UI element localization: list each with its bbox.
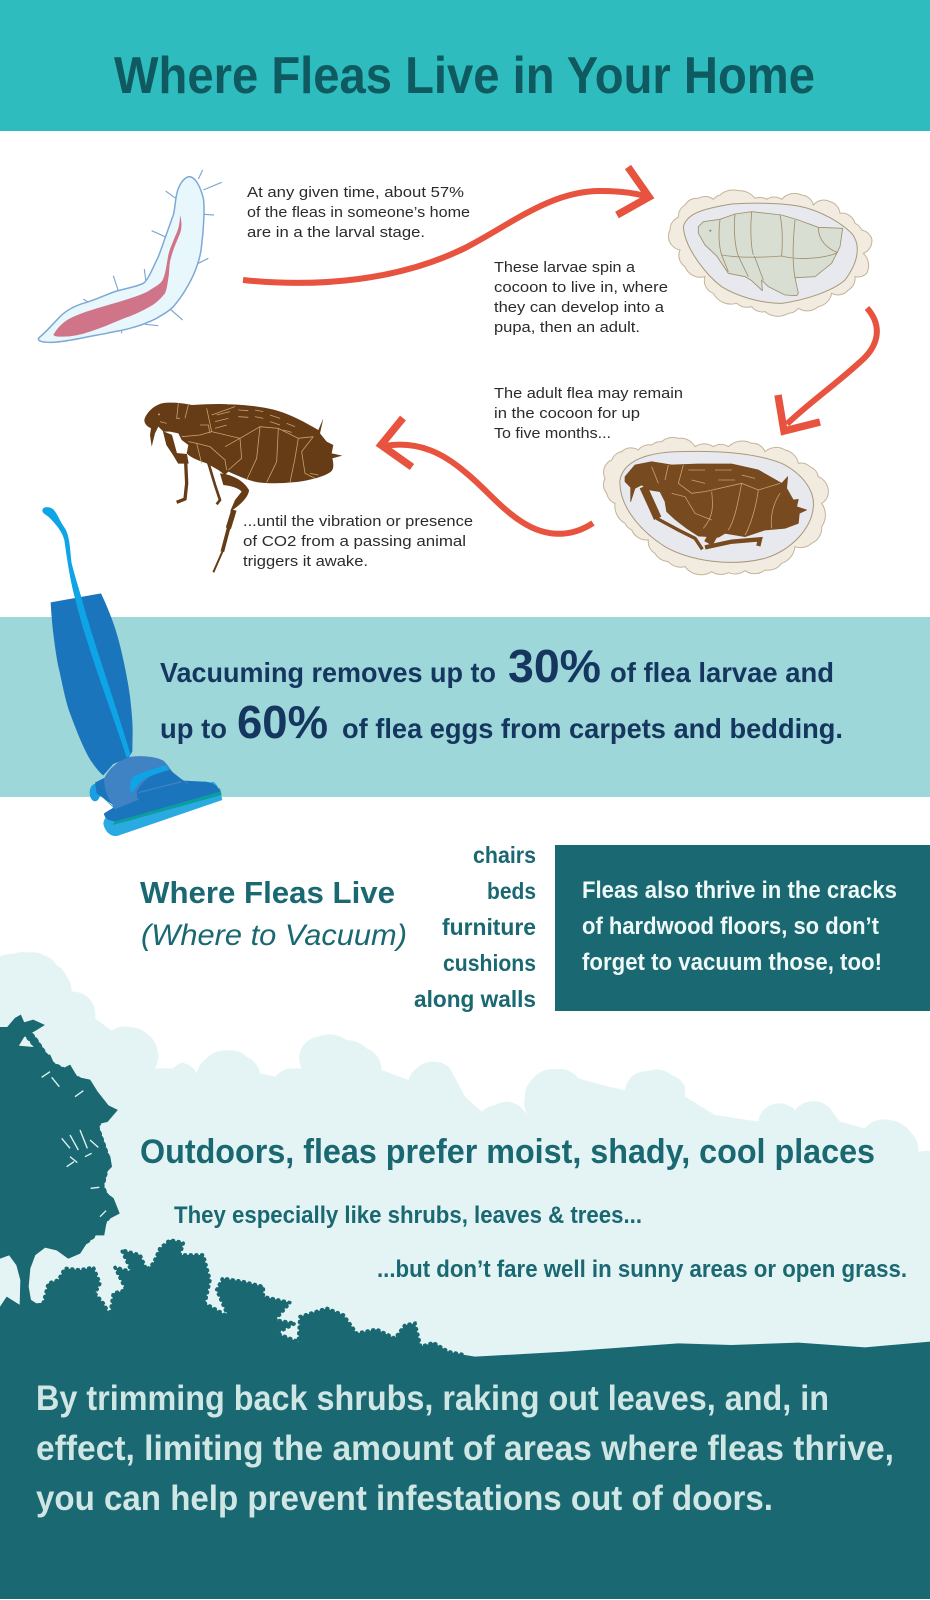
vacuuming statistics: Vacuuming removes up to — [160, 657, 496, 688]
text: prevention advice: By trimming back shrubs, raking out leaves, and, in — [36, 1379, 829, 1418]
heading: where fleas live: Where Fleas Live — [140, 875, 395, 910]
illustration: pale hill and cloud backdrop — [0, 952, 930, 1407]
text: cocoon: they can develop into a — [494, 299, 665, 316]
heading: where fleas live — [140, 875, 407, 952]
callout: hardwood floors: forget to vacuum those, too! — [582, 949, 882, 976]
arrow: back to free adult flea — [381, 418, 593, 534]
vacuuming statistics: 60% — [237, 696, 328, 748]
list: places to vacuum: furniture — [442, 914, 536, 940]
text: cocoon: These larvae spin a — [494, 259, 636, 276]
text: larval stage: At any given time, about 57% — [247, 184, 464, 201]
text: larval stage: are in a the larval stage. — [247, 224, 425, 241]
heading: where fleas live: (Where to Vacuum) — [141, 919, 407, 952]
text: trigger: of CO2 from a passing animal — [243, 533, 466, 550]
text: cocoon — [494, 259, 668, 336]
text: trigger: triggers it awake. — [243, 553, 368, 570]
icon: cocoon with pupa — [668, 190, 872, 316]
illustration: tree and shrub silhouette — [0, 1015, 930, 1599]
text: trigger — [243, 513, 473, 570]
header banner — [0, 0, 930, 131]
panel: vacuuming band — [0, 617, 930, 797]
vacuuming statistics: 30% — [508, 640, 601, 692]
text: prevention advice: you can help prevent infestations out of doors. — [36, 1479, 773, 1518]
list: places to vacuum — [414, 842, 536, 1012]
callout: hardwood floors — [555, 845, 930, 1011]
arrow: cocoon to adult in cocoon — [778, 308, 877, 431]
arrow: larva to cocoon — [243, 167, 649, 283]
text: larval stage: of the fleas in someone’s home — [247, 204, 470, 221]
list: places to vacuum: beds — [487, 878, 536, 904]
tree — [0, 1015, 119, 1305]
text: adult remains — [494, 385, 683, 442]
title: Where Fleas Live in Your Home — [114, 47, 815, 105]
text: adult remains: in the cocoon for up — [494, 405, 640, 422]
vacuuming statistics: of flea eggs from carpets and bedding. — [342, 713, 843, 744]
text: outdoors: They especially like shrubs, leaves & trees... — [174, 1202, 642, 1229]
text: larval stage — [247, 184, 470, 241]
text: cocoon: pupa, then an adult. — [494, 319, 640, 336]
vacuuming statistics: of flea larvae and — [610, 657, 834, 688]
callout: hardwood floors: of hardwood floors, so don’t — [582, 913, 879, 940]
text: prevention advice — [36, 1379, 894, 1518]
ground shrubs and hill — [0, 1240, 930, 1599]
text: adult remains: To five months... — [494, 425, 611, 442]
text: outdoors: Outdoors, fleas prefer moist, shady, cool places — [140, 1133, 875, 1171]
icon: flea larva — [38, 170, 222, 342]
list: places to vacuum: chairs — [473, 842, 536, 868]
callout: hardwood floors: Fleas also thrive in the cracks — [582, 877, 897, 904]
icon: adult flea — [144, 403, 342, 572]
text: outdoors — [140, 1133, 907, 1283]
text: prevention advice: effect, limiting the amount of areas where fleas thrive, — [36, 1429, 894, 1468]
list: places to vacuum: along walls — [414, 986, 536, 1012]
canopy flecks — [42, 1072, 106, 1217]
vacuuming statistics — [160, 640, 843, 748]
vacuuming statistics: up to — [160, 713, 227, 744]
list: places to vacuum: cushions — [443, 950, 536, 976]
icon: adult flea in cocoon — [603, 437, 828, 575]
icon: vacuum cleaner — [42, 507, 222, 836]
text: trigger: ...until the vibration or presence — [243, 513, 473, 530]
text: adult remains: The adult flea may remain — [494, 385, 683, 402]
text: cocoon: cocoon to live in, where — [494, 279, 668, 296]
